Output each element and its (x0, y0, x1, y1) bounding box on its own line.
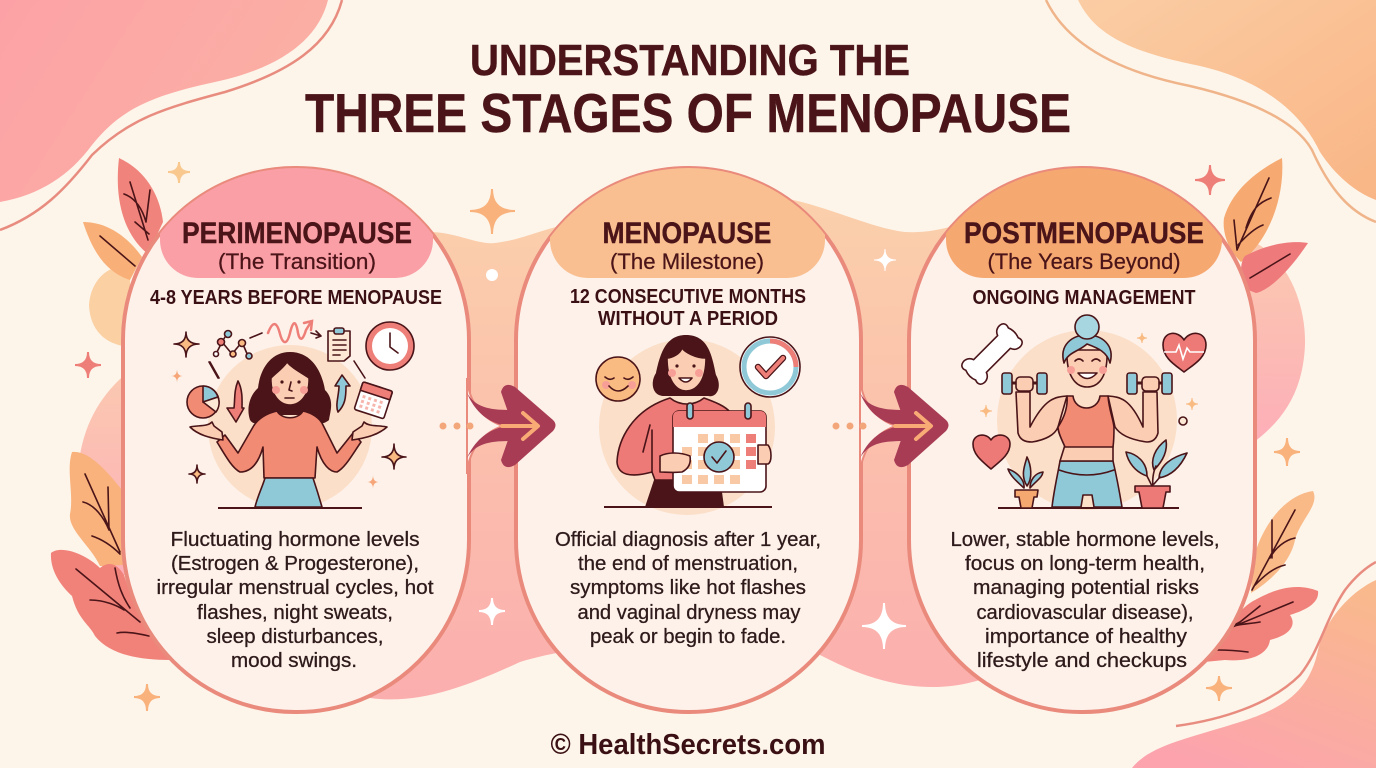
subheading: the years beyond: (The Years Beyond) (988, 249, 1180, 274)
title: UNDERSTANDING THE (470, 36, 910, 85)
background blob: right pink (1250, 240, 1305, 445)
timing: 12 consecutive months: WITHOUT A PERIOD (598, 308, 778, 330)
heading band: perimenopause (160, 168, 433, 278)
footer credit: © HealthSecrets.com (550, 729, 826, 761)
calendar (354, 382, 393, 419)
timing: ongoing management: ONGOING MANAGEMENT (972, 287, 1196, 309)
subheading: the milestone: (The Milestone) (610, 249, 764, 274)
background blob: bottom right (1132, 580, 1376, 768)
arrow: down (227, 381, 244, 422)
plant right (1126, 440, 1187, 508)
illustration: woman juggling symptoms (171, 321, 414, 509)
panel: perimenopause (123, 120, 469, 712)
background blob: left orange (89, 267, 130, 347)
body text: postmenopause: lifestyle and checkups (977, 650, 1187, 672)
heading band: postmenopause (946, 168, 1222, 278)
leaf: lower right coral (1204, 587, 1318, 662)
hands (190, 422, 223, 440)
network chart (216, 332, 248, 356)
hands (660, 453, 690, 472)
body text: postmenopause: Lower, stable hormone levels, (950, 529, 1220, 551)
arrow: up (335, 375, 350, 412)
heading: perimenopause: PERIMENOPAUSE (182, 217, 412, 250)
pie chart (187, 386, 219, 418)
arrow: perimenopause to menopause (440, 378, 556, 474)
leaf: left orange (83, 222, 142, 280)
heading: postmenopause: POSTMENOPAUSE (964, 217, 1204, 250)
panel: postmenopause (909, 120, 1255, 712)
decorative sparkles (75, 162, 1300, 711)
timing: 4-8 years: 4-8 YEARS BEFORE MENOPAUSE (150, 287, 442, 309)
midriff (1060, 445, 1113, 461)
dumbbell left (1002, 373, 1047, 394)
blouse and arm (617, 398, 730, 480)
trousers (645, 477, 724, 507)
arrow: menopause to postmenopause (832, 378, 948, 474)
leaf: right top orange (1224, 158, 1282, 262)
sparkles (174, 332, 199, 357)
body text: perimenopause: Fluctuating hormone levels (170, 529, 420, 551)
background wave band (300, 198, 1000, 699)
sweater and arms (217, 411, 361, 478)
plant left (1008, 457, 1043, 508)
timing: 12 consecutive months: 12 CONSECUTIVE MONTHS (570, 286, 806, 308)
background blob: top right (1078, 0, 1376, 200)
leaf: lower left orange (70, 452, 123, 566)
timing: 12 consecutive months (570, 286, 806, 330)
heart with pulse (1163, 333, 1206, 372)
body text: menopause (555, 529, 821, 648)
body text: menopause: peak or begin to fade. (590, 626, 786, 648)
illustration: woman exercising (959, 315, 1206, 510)
calendar (673, 403, 766, 492)
body text: menopause: symptoms like hot flashes (570, 577, 806, 599)
leaf: lower left coral (51, 550, 170, 660)
body text: menopause: and vaginal dryness may (578, 602, 800, 624)
illustration: woman holding calendar (596, 335, 800, 515)
dumbbell right (1127, 373, 1172, 394)
body text: postmenopause: focus on long-term health, (965, 553, 1205, 575)
body text: postmenopause: cardiovascular disease), (976, 602, 1194, 624)
body text: perimenopause: sleep disturbances, (206, 626, 384, 648)
body text: postmenopause: managing potential risks (973, 577, 1199, 599)
body text: perimenopause: flashes, night sweats, (197, 602, 393, 624)
left arm (1016, 392, 1067, 442)
heading: menopause: MENOPAUSE (602, 217, 772, 250)
title: THREE STAGES OF MENOPAUSE (305, 82, 1071, 144)
subheading: the transition: (The Transition) (218, 249, 376, 274)
neck and face (1067, 350, 1107, 387)
right arm (1108, 392, 1158, 442)
bone (959, 321, 1025, 387)
body text: postmenopause (950, 529, 1220, 672)
leaf: lower right orange (1251, 491, 1314, 593)
panel: menopause (516, 120, 861, 712)
leggings (1052, 461, 1122, 507)
hormone wave (268, 322, 311, 342)
hair (1063, 335, 1111, 363)
body text: postmenopause: importance of healthy (985, 626, 1187, 648)
background blob: left pink (77, 370, 130, 575)
background blob: top left (0, 0, 328, 202)
body text: menopause: Official diagnosis after 1 year, (555, 529, 821, 551)
leaf: right coral (1241, 242, 1308, 293)
leaf: left top coral (118, 158, 163, 254)
sparkles and ring (980, 333, 1198, 417)
hair (653, 335, 719, 396)
face (271, 362, 309, 405)
smiley (596, 357, 640, 401)
heading band: menopause (550, 168, 825, 278)
tank top (1058, 396, 1114, 447)
body text: perimenopause (156, 529, 434, 672)
check ring (740, 337, 800, 397)
body text: perimenopause: mood swings. (231, 650, 357, 672)
trousers (255, 478, 322, 507)
clock (366, 322, 414, 370)
heart (973, 435, 1010, 469)
body text: menopause: the end of menstruation, (578, 553, 798, 575)
title (305, 36, 1071, 144)
face (667, 348, 706, 391)
body text: perimenopause: irregular menstrual cycles, hot (156, 577, 434, 599)
body text: perimenopause: (Estrogen & Progesterone), (171, 553, 419, 575)
hair (248, 352, 331, 423)
clipboard (328, 328, 350, 361)
